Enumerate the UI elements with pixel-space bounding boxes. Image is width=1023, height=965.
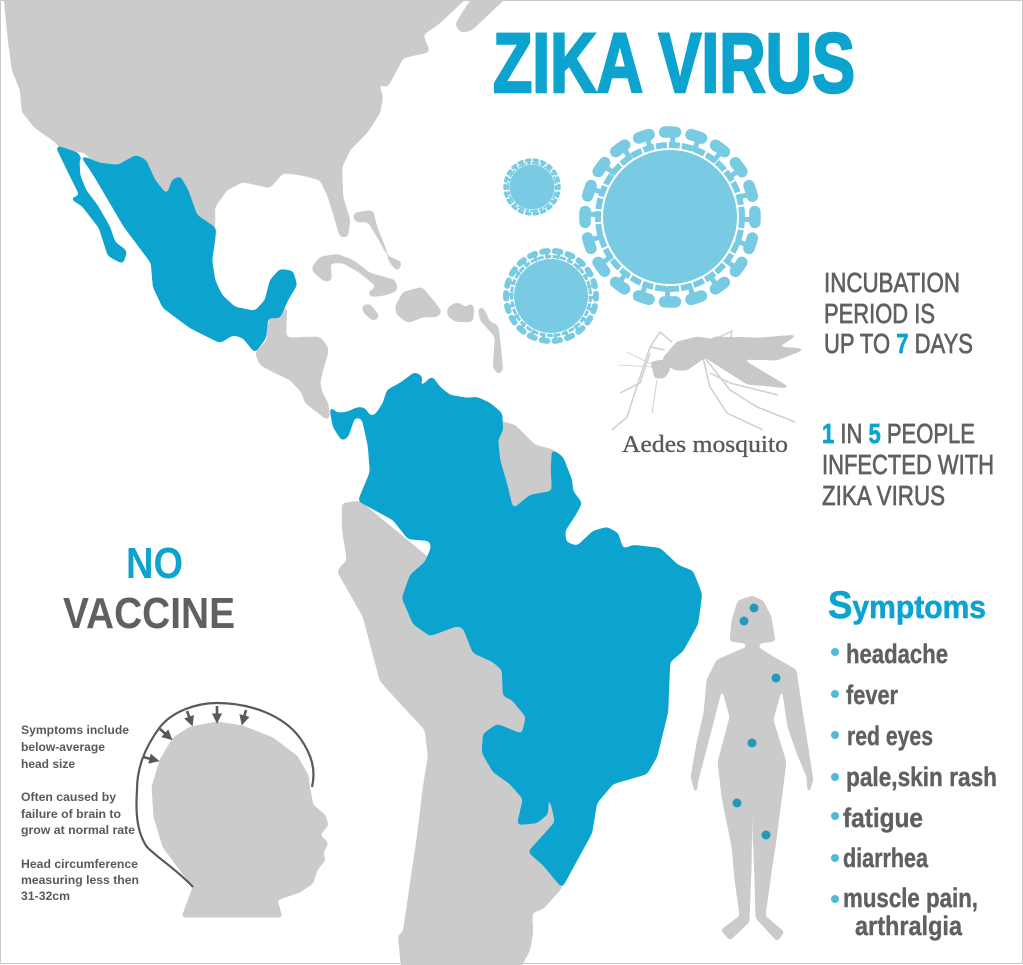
body symptom dots <box>732 604 780 840</box>
text: microcephaly notes: failure of brain to <box>21 807 121 821</box>
text: no vaccine: NO <box>126 539 183 588</box>
icon: large virus <box>585 132 755 302</box>
text: microcephaly notes: below-average <box>21 740 105 754</box>
list: symptoms: muscle pain, <box>843 883 978 913</box>
text: incubation period: UP TO 7 DAYS <box>824 328 973 359</box>
arrows: head shrink <box>143 706 246 760</box>
icon: medium virus <box>506 251 596 341</box>
text: microcephaly notes: Head circumference <box>21 857 138 871</box>
text: incubation period: INCUBATION <box>824 267 960 298</box>
list: symptoms: fatigue <box>843 803 923 833</box>
icon: human body <box>691 596 813 941</box>
icon: small virus <box>505 160 559 214</box>
text: microcephaly notes: head size <box>21 757 75 771</box>
text: microcephaly notes: grow at normal rate <box>21 823 135 837</box>
map: gray land <box>3 0 562 965</box>
text: incubation period <box>824 267 973 359</box>
text: microcephaly notes: Symptoms include <box>21 723 129 737</box>
text: microcephaly notes: 31-32cm <box>21 889 70 903</box>
text: no vaccine <box>63 539 235 638</box>
list: symptoms: diarrhea <box>843 843 929 873</box>
icon: head with microcephaly <box>136 703 328 917</box>
text: 1 in 5 people <box>822 418 994 511</box>
mosquito caption: Aedes mosquito <box>622 432 788 458</box>
map: blue Mexico <box>55 145 297 353</box>
text: 1 in 5 people: ZIKA VIRUS <box>822 480 945 511</box>
text: microcephaly notes <box>21 723 139 903</box>
text: microcephaly notes: Often caused by <box>21 790 116 804</box>
heading: symptoms: Symptoms <box>828 584 986 627</box>
list: symptoms: headache <box>846 639 948 669</box>
list: symptoms: red eyes <box>847 721 933 751</box>
list: symptoms: pale,skin rash <box>846 762 997 792</box>
list: symptoms: arthralgia <box>855 911 963 941</box>
icon: Aedes mosquito <box>612 331 805 430</box>
map: Americas <box>3 0 702 965</box>
map: blue Colombia and Brazil <box>329 372 702 888</box>
text: no vaccine: VACCINE <box>63 589 235 638</box>
title: ZIKA VIRUS <box>493 16 855 110</box>
text: microcephaly notes: measuring less then <box>21 873 139 887</box>
text: 1 in 5 people: 1 IN 5 PEOPLE <box>822 418 975 449</box>
text: incubation period: PERIOD IS <box>824 298 935 329</box>
list bullets <box>831 648 839 903</box>
list: symptoms: fever <box>846 680 898 710</box>
list: symptoms <box>831 639 997 941</box>
